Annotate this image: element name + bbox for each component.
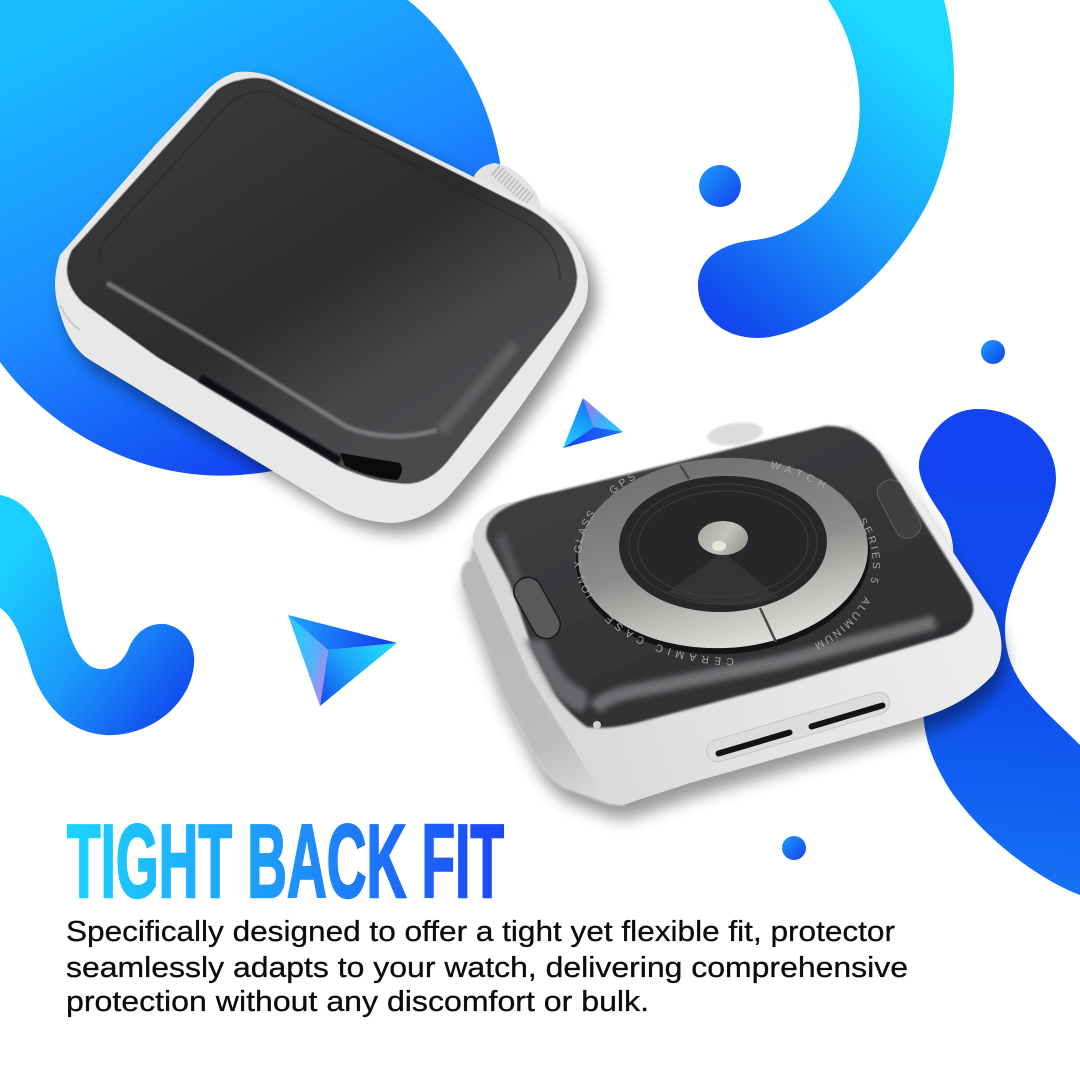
case seam	[60, 305, 80, 330]
small crown	[706, 419, 764, 449]
sensor ring	[573, 451, 873, 655]
ring dark rim	[571, 452, 875, 662]
glass lighter wedge	[668, 552, 778, 605]
engraved text	[574, 460, 880, 666]
crack at corner	[593, 721, 601, 729]
background squiggle: top right	[698, 0, 954, 338]
plate left shine	[500, 535, 520, 590]
release button: left	[509, 572, 565, 644]
engraved text: WATCH	[772, 460, 826, 489]
speaker grille	[704, 689, 892, 765]
right sheen band	[440, 345, 515, 432]
watch: front view	[55, 72, 596, 533]
engraved text: ION-X GLASS	[574, 510, 594, 598]
screen sheen	[107, 283, 437, 436]
sensor centre	[698, 521, 748, 555]
body text: protection without any discomfort or bulk.	[66, 986, 649, 1018]
dot: right	[981, 340, 1005, 364]
icon: large triangle	[288, 615, 397, 706]
back plate	[486, 426, 973, 728]
digital crown	[474, 163, 541, 215]
engraved text: ALUMINUM	[815, 596, 870, 650]
sensor rings	[627, 481, 819, 607]
dot: upper	[699, 165, 741, 207]
inner rim line	[100, 91, 560, 280]
plate lower-left shine	[525, 640, 588, 712]
background squiggle: left	[0, 495, 194, 735]
case side	[461, 545, 623, 805]
engraved text: SERIES 5	[860, 518, 880, 584]
ring splits	[680, 465, 776, 642]
sensor highlight	[712, 541, 726, 551]
watch: back view	[456, 422, 1016, 828]
bottom dark strip	[200, 378, 340, 461]
watch case	[55, 72, 588, 523]
body text: seamlessly adapts to your watch, delivering comprehensive	[66, 952, 908, 984]
dot: lower	[782, 836, 806, 860]
body text	[66, 916, 908, 1018]
watch shadow	[63, 82, 596, 533]
background blob: right	[919, 409, 1080, 895]
sensor glass	[617, 472, 829, 616]
release button: right	[873, 476, 925, 542]
engraved text: CERAMIC CASE	[604, 615, 734, 666]
black reflection patch	[340, 453, 402, 480]
icon: small triangle	[563, 398, 623, 448]
watch screen	[67, 78, 577, 484]
body text: Specifically designed to offer a tight yet flexible fit, protector	[66, 916, 895, 948]
case top	[473, 425, 1001, 805]
watch shadow	[465, 439, 1006, 819]
engraved text: GPS	[610, 474, 635, 493]
background blob: top left	[0, 0, 503, 476]
lower gloss band	[595, 622, 935, 708]
title: TIGHT BACK FIT	[67, 804, 504, 920]
